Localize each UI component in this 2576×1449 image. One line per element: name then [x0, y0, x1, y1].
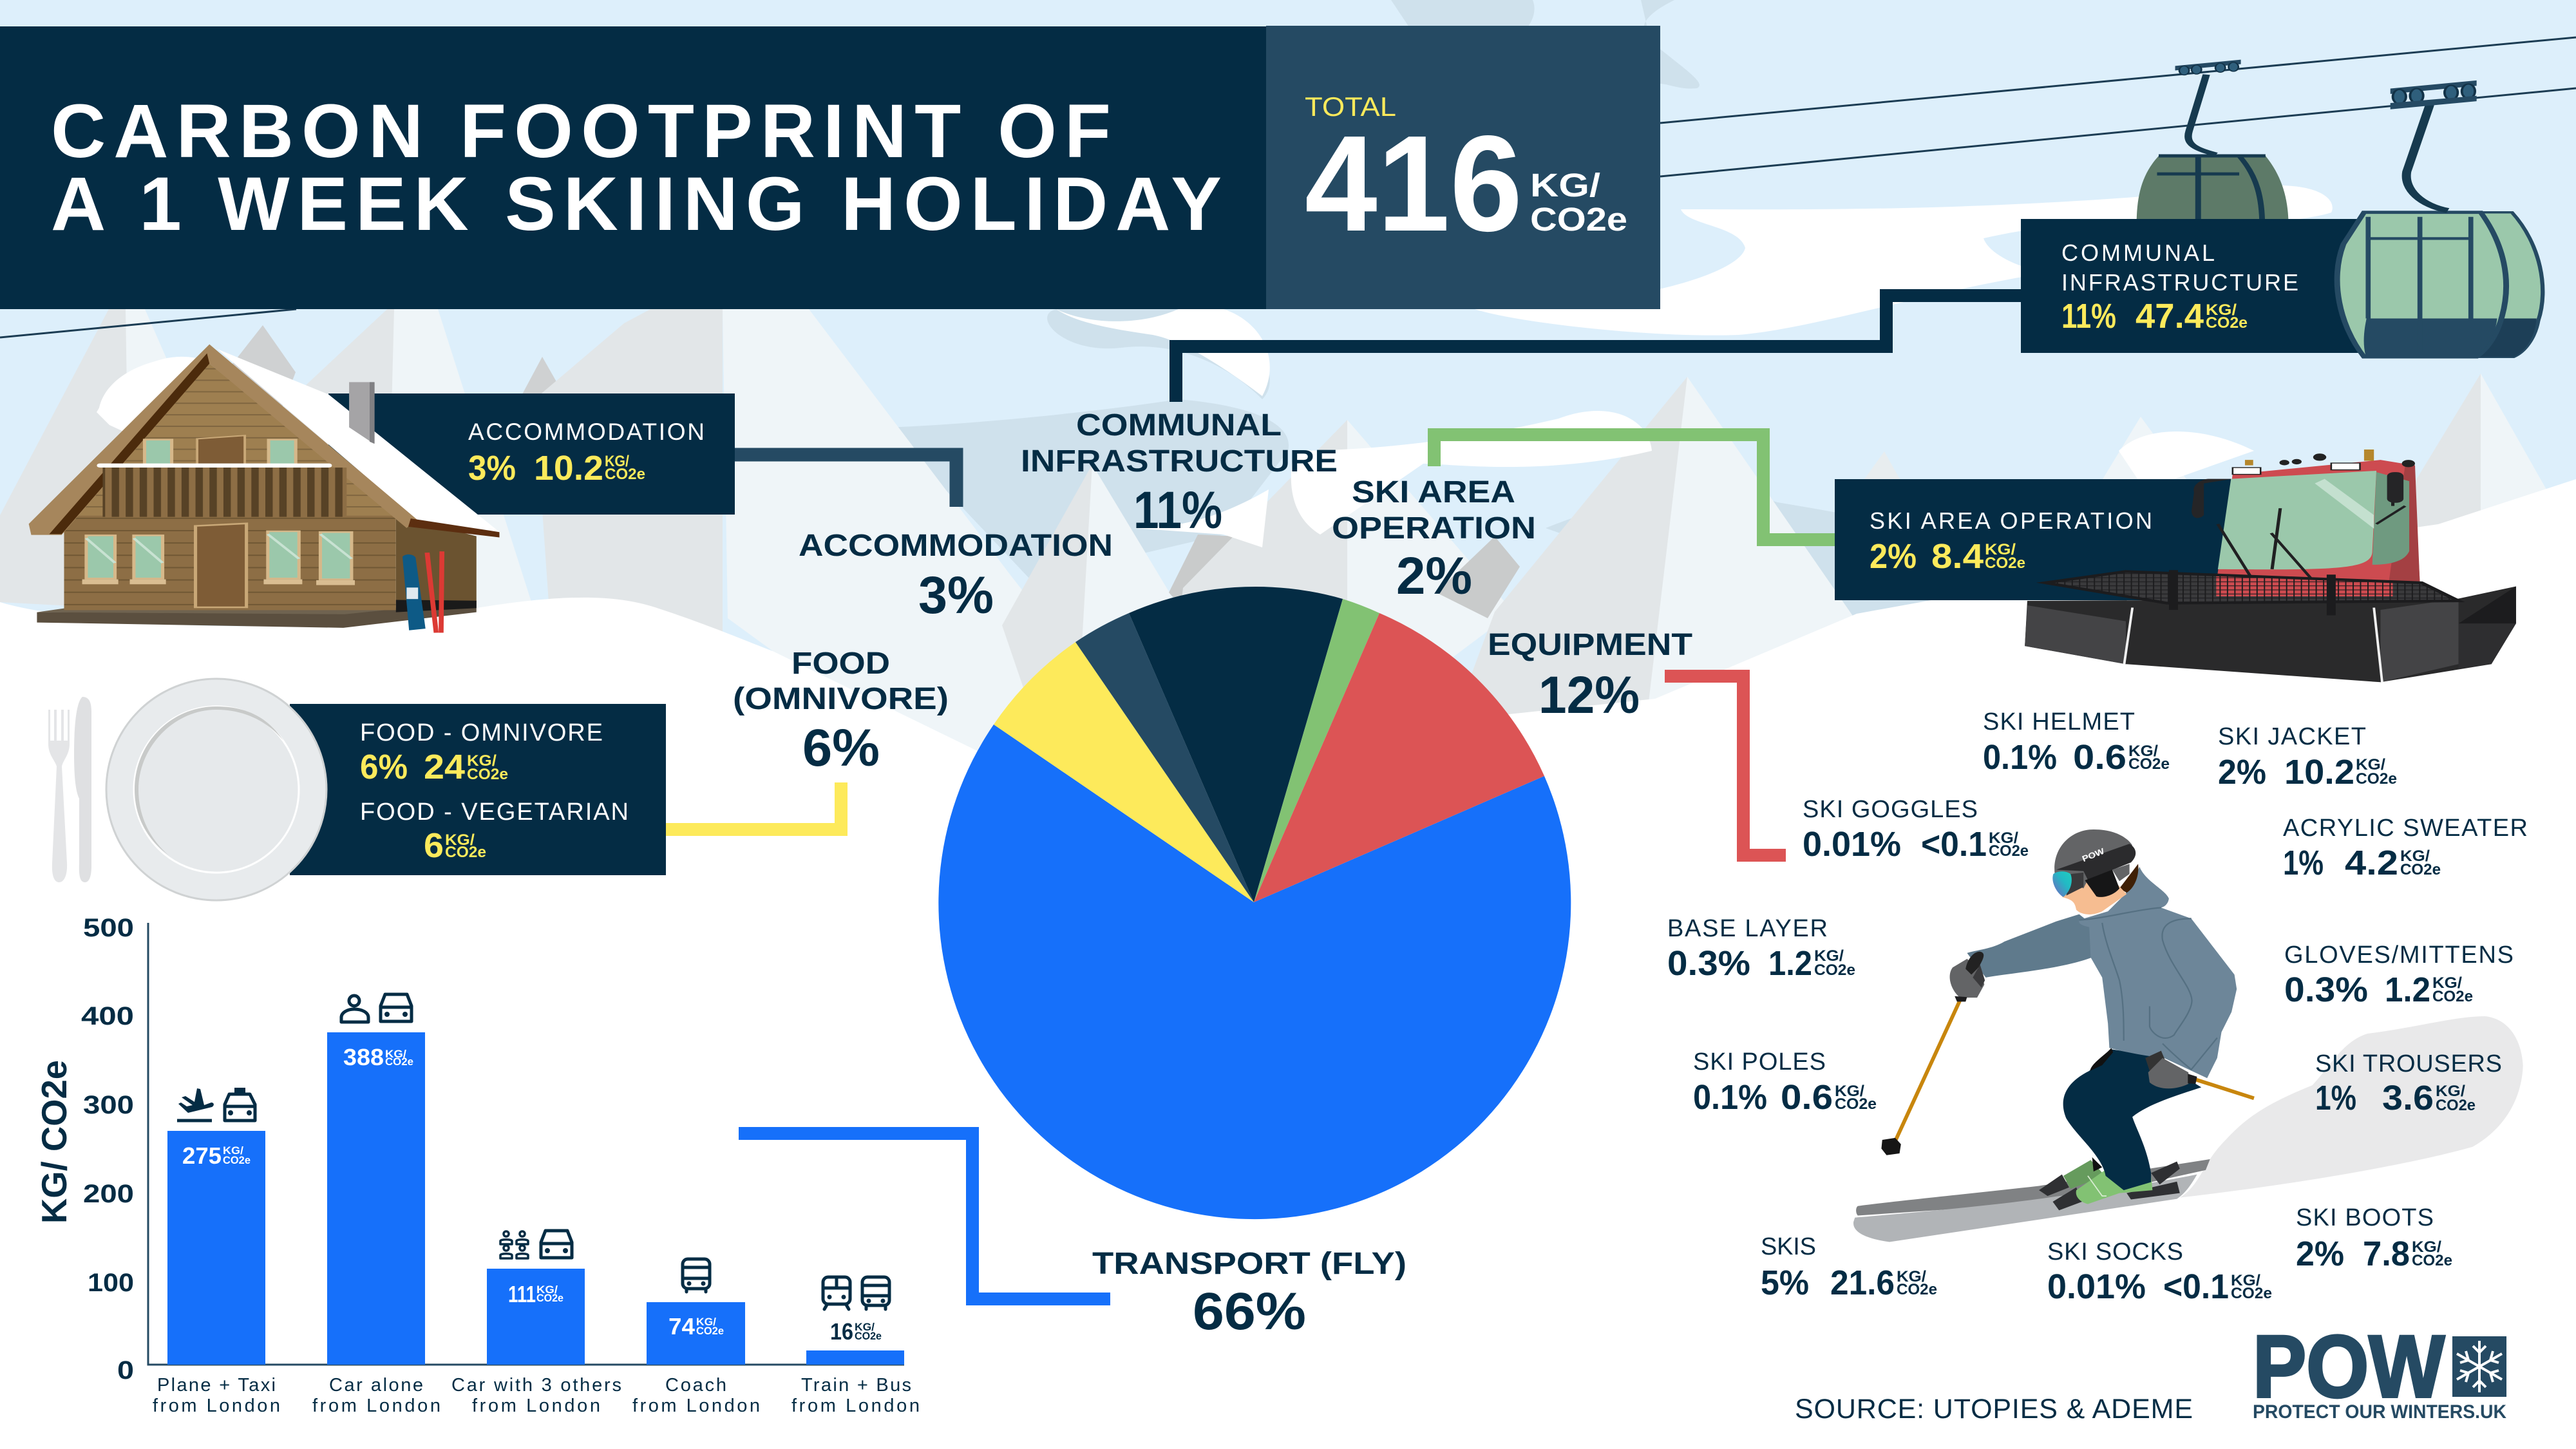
jacket arm [1967, 914, 2094, 978]
category label: from London [632, 1396, 760, 1416]
item: ski poles: SKI POLES [1693, 1048, 1826, 1075]
slice: transport 66% [938, 724, 1571, 1219]
category label [312, 1375, 440, 1416]
bar: coach: 74 [668, 1313, 695, 1340]
bar: train + bus [806, 1318, 904, 1365]
item: gloves and mittens [2284, 942, 2514, 1009]
icon: car [541, 1231, 572, 1258]
item: ski goggles: 0.01% [1803, 825, 1901, 864]
item: ski goggles: KG/ [1989, 829, 2018, 847]
bar: car alone: 388 [343, 1044, 384, 1070]
hair [2119, 864, 2138, 893]
illustration: skier [1853, 829, 2254, 1242]
panel: total: CO2e [1530, 201, 1627, 238]
equipment items [1667, 708, 2528, 1306]
item: ski helmet: 0.6 [2073, 738, 2126, 777]
label: communal infrastructure: 11% [1133, 481, 1222, 540]
item: ski trousers: CO2e [2436, 1097, 2476, 1114]
logo: Protect Our Winters: POW [2253, 1318, 2445, 1416]
bar: train + bus: CO2e [855, 1330, 882, 1342]
label: accommodation: ACCOMMODATION [799, 529, 1113, 563]
item: ski helmet: SKI HELMET [1983, 708, 2135, 735]
panel: ski area operation: CO2e [1985, 554, 2025, 572]
item: gloves and mittens: 0.3% [2284, 971, 2368, 1009]
item: acrylic sweater: 4.2 [2345, 844, 2398, 882]
slice: accommodation 3% [1075, 613, 1254, 902]
y axis labels: 100 [88, 1269, 134, 1297]
icon: train [823, 1277, 850, 1309]
panel: food: KG/ [467, 752, 497, 770]
item: ski trousers: SKI TROUSERS [2315, 1050, 2502, 1077]
category label [153, 1375, 280, 1416]
item: ski helmet: CO2e [2128, 755, 2170, 773]
item: ski helmet [1983, 708, 2170, 777]
icon: person [341, 996, 368, 1022]
panel: communal infrastructure: CO2e [2206, 314, 2248, 332]
bar: plane + taxi: 275 [182, 1142, 222, 1169]
panel: ski area operation [1835, 479, 2247, 600]
panel: food: 6 [424, 826, 444, 865]
illustration: snow spray [2180, 1016, 2523, 1198]
bar: coach: KG/ [696, 1316, 716, 1328]
item: ski jacket: 10.2 [2284, 753, 2354, 791]
bar: plane + taxi [167, 1131, 265, 1365]
category label [451, 1375, 621, 1416]
category label: Train + Bus [801, 1375, 911, 1396]
panel: communal infrastructure: 47.4 [2136, 297, 2204, 336]
item: skis: SKIS [1761, 1233, 1816, 1260]
label: ski area operation: 2% [1396, 547, 1472, 605]
panel: communal infrastructure [2021, 219, 2369, 353]
panel: communal infrastructure: 11% [2061, 297, 2116, 336]
label: food: FOOD [791, 647, 890, 681]
back glove [2145, 1051, 2197, 1088]
panel: ski area operation: SKI AREA OPERATION [1870, 507, 2152, 534]
category label [791, 1375, 920, 1416]
item: base layer [1667, 915, 1855, 983]
bar chart: transport options [34, 914, 920, 1416]
panel: accommodation: 3% [468, 449, 516, 488]
item: ski jacket: KG/ [2356, 756, 2385, 773]
panel: total: 416 [1305, 107, 1522, 260]
label: ski area operation [1332, 475, 1536, 605]
item: ski trousers [2315, 1050, 2502, 1117]
panel: food: FOOD - VEGETARIAN [360, 799, 629, 826]
item: ski socks: SKI SOCKS [2047, 1238, 2183, 1265]
illustration: front gondola [2337, 80, 2543, 357]
icon: coach [683, 1259, 710, 1292]
item: ski helmet: KG/ [2128, 743, 2158, 760]
y axis labels: 200 [83, 1180, 134, 1208]
category label [632, 1375, 760, 1416]
item: ski jacket [2218, 723, 2397, 791]
trousers [2063, 1049, 2201, 1190]
item: ski goggles [1803, 796, 2029, 864]
connector: equipment [1665, 676, 1786, 855]
item: base layer: KG/ [1814, 947, 1844, 965]
item: ski boots: KG/ [2412, 1238, 2441, 1256]
label: food [733, 647, 949, 777]
panel: total: TOTAL [1305, 91, 1396, 122]
item: acrylic sweater: 1% [2283, 844, 2324, 882]
category label: from London [791, 1396, 920, 1416]
connector: ski area operation [1434, 435, 1835, 540]
item: skis: 5% [1761, 1264, 1809, 1302]
panel: accommodation: KG/ [605, 453, 629, 470]
face [2062, 874, 2126, 914]
item: base layer: 0.3% [1667, 944, 1750, 983]
label: transport: 66% [1193, 1282, 1306, 1341]
illustration: plate and cutlery [48, 679, 327, 900]
item: ski boots: SKI BOOTS [2296, 1204, 2434, 1231]
bar: car alone [327, 1032, 425, 1365]
item: base layer: 1.2 [1768, 944, 1812, 983]
jacket [2079, 867, 2237, 1078]
panel: communal infrastructure: KG/ [2206, 301, 2237, 319]
bar: car with 3 others: CO2e [536, 1292, 564, 1304]
skis [1853, 1159, 2210, 1242]
item: ski socks [2047, 1238, 2272, 1306]
item: ski boots: CO2e [2412, 1252, 2452, 1269]
panel: food: 24 [424, 748, 465, 786]
category label: Car alone [329, 1375, 423, 1396]
item: ski socks: 0.01% [2047, 1267, 2146, 1306]
item: ski poles: KG/ [1835, 1083, 1864, 1100]
boots and bindings [2039, 1157, 2180, 1210]
y axis labels: 0 [117, 1356, 134, 1385]
y axis labels: 500 [83, 914, 134, 942]
ear pad [2085, 869, 2119, 897]
category label: Car with 3 others [451, 1375, 621, 1396]
item: gloves and mittens: 1.2 [2385, 971, 2430, 1009]
item: skis: 21.6 [1830, 1264, 1895, 1302]
panel: food: FOOD - OMNIVORE [360, 719, 603, 746]
label: equipment: EQUIPMENT [1488, 628, 1692, 662]
item: ski poles: 0.1% [1693, 1078, 1767, 1117]
icon: taxi [225, 1088, 255, 1121]
y axis labels: 300 [83, 1091, 134, 1119]
slice: ski area operation 2% [1254, 599, 1379, 902]
item: ski trousers: 3.6 [2382, 1079, 2434, 1117]
pie chart [938, 587, 1571, 1219]
label: communal infrastructure: COMMUNAL [1076, 408, 1282, 442]
bar: car alone: KG/ [385, 1048, 406, 1060]
title [51, 89, 1222, 247]
item: ski socks: KG/ [2231, 1272, 2260, 1289]
logo: Protect Our Winters: PROTECT OUR WINTERS.UK [2253, 1401, 2506, 1423]
slice: communal infrastructure 11% [1129, 587, 1343, 902]
icon: plane [177, 1088, 214, 1121]
label: accommodation: 3% [918, 566, 994, 625]
bar: plane + taxi: CO2e [223, 1154, 251, 1166]
y axis labels [81, 914, 134, 1385]
item: gloves and mittens: CO2e [2432, 988, 2473, 1005]
item: gloves and mittens: KG/ [2432, 974, 2462, 992]
label: communal infrastructure [1021, 408, 1338, 540]
bar: car with 3 others [487, 1269, 585, 1365]
item: skis [1761, 1233, 1937, 1302]
label: ski area operation: SKI AREA [1352, 475, 1515, 509]
icon: car [381, 994, 412, 1021]
pole basket [1881, 1138, 1901, 1155]
item: ski socks: CO2e [2231, 1285, 2272, 1302]
slice: food 6% [994, 642, 1254, 902]
bar: plane + taxi: KG/ [223, 1144, 243, 1157]
icon: four people [500, 1231, 528, 1258]
item: ski goggles: <0.1 [1921, 825, 1987, 864]
panel: food: KG/ [445, 831, 475, 849]
cable wires [0, 37, 2576, 337]
source line: SOURCE: UTOPIES & ADEME [1795, 1394, 2193, 1425]
title band [0, 26, 1266, 309]
label: food: 6% [802, 719, 880, 777]
ski poles [1896, 1001, 2254, 1140]
label: transport [1092, 1247, 1406, 1341]
item: skis: CO2e [1897, 1281, 1937, 1298]
item: ski goggles: CO2e [1989, 842, 2029, 860]
label: accommodation [799, 529, 1113, 625]
panel: accommodation [328, 393, 735, 515]
item: acrylic sweater: KG/ [2400, 848, 2430, 865]
item: ski boots [2296, 1204, 2452, 1273]
label: equipment [1488, 628, 1692, 724]
goggles [2052, 871, 2083, 897]
axes [148, 923, 904, 1365]
item: ski jacket: 2% [2218, 753, 2266, 791]
bar: car with 3 others: KG/ [536, 1283, 558, 1296]
label: transport: TRANSPORT (FLY) [1092, 1247, 1406, 1281]
panel: ski area operation: KG/ [1985, 541, 2016, 558]
bar: train + bus: 16 [830, 1318, 853, 1345]
item: ski poles [1693, 1048, 1877, 1117]
illustration: back gondola [2137, 60, 2289, 226]
panel: total: KG/ [1530, 167, 1600, 204]
connector: food [666, 782, 841, 829]
category label: Plane + Taxi [157, 1375, 276, 1396]
label: food: (OMNIVORE) [733, 682, 949, 716]
slice: equipment 12% [1254, 613, 1544, 902]
illustration: chalet [29, 345, 501, 633]
connector: transport [739, 1133, 1110, 1299]
item: gloves and mittens: GLOVES/MITTENS [2284, 942, 2514, 969]
connector: communal infrastructure [1176, 296, 2021, 402]
category label: Coach [665, 1375, 726, 1396]
label: communal infrastructure: INFRASTRUCTURE [1021, 444, 1338, 478]
item: ski trousers: KG/ [2436, 1083, 2465, 1100]
bar: train + bus: KG/ [855, 1321, 875, 1333]
item: acrylic sweater: ACRYLIC SWEATER [2283, 815, 2528, 842]
connector: accommodation [735, 455, 956, 507]
front glove [1950, 952, 1985, 1001]
item: ski boots: 7.8 [2363, 1235, 2410, 1273]
item: ski poles: 0.6 [1781, 1078, 1833, 1117]
icon: bus [862, 1277, 889, 1309]
item: skis: KG/ [1897, 1268, 1926, 1285]
item: ski trousers: 1% [2315, 1079, 2356, 1117]
item: ski boots: 2% [2296, 1235, 2344, 1273]
panel: accommodation: 10.2 [534, 449, 603, 488]
item: ski jacket: SKI JACKET [2218, 723, 2366, 750]
panel: ski area operation: 2% [1870, 537, 1917, 576]
panel: food: CO2e [467, 766, 508, 783]
title: CARBON FOOTPRINT OF [51, 89, 1111, 174]
item: ski socks: <0.1 [2163, 1267, 2229, 1306]
category label: from London [312, 1396, 440, 1416]
bar: coach: CO2e [696, 1325, 724, 1337]
icon: snowflake [2452, 1336, 2506, 1397]
helmet [2054, 829, 2132, 888]
panel: food [290, 704, 666, 875]
bar: car alone: CO2e [385, 1056, 413, 1068]
item: base layer: CO2e [1814, 961, 1855, 979]
item: ski helmet: 0.1% [1983, 738, 2057, 777]
item: ski goggles: SKI GOGGLES [1803, 796, 1978, 823]
item: acrylic sweater: CO2e [2400, 861, 2441, 878]
bar: coach [647, 1302, 745, 1365]
item: ski poles: CO2e [1835, 1095, 1877, 1113]
panel: food: CO2e [445, 844, 486, 861]
panel: communal infrastructure: INFRASTRUCTURE [2061, 269, 2298, 296]
panel: accommodation: ACCOMMODATION [468, 419, 705, 445]
illustration: snow groomer [2025, 450, 2516, 682]
category label: from London [472, 1396, 600, 1416]
panel: communal infrastructure: COMMUNAL [2061, 240, 2215, 266]
y axis labels: 400 [81, 1002, 134, 1030]
panel: accommodation: CO2e [605, 466, 645, 483]
label: equipment: 12% [1539, 666, 1640, 724]
panel: food: 6% [360, 748, 408, 786]
item: base layer: BASE LAYER [1667, 915, 1828, 942]
panel: total [1266, 26, 1660, 309]
y axis title: KG/ CO2e [34, 1060, 74, 1224]
title: A 1 WEEK SKIING HOLIDAY [51, 162, 1222, 247]
category label: from London [153, 1396, 280, 1416]
item: ski jacket: CO2e [2356, 770, 2397, 788]
helmet logo: POW [2081, 846, 2107, 864]
label: ski area operation: OPERATION [1332, 511, 1536, 545]
item: acrylic sweater [2283, 815, 2528, 882]
bar: car with 3 others: 111 [508, 1281, 536, 1307]
panel: ski area operation: 8.4 [1931, 537, 1984, 576]
